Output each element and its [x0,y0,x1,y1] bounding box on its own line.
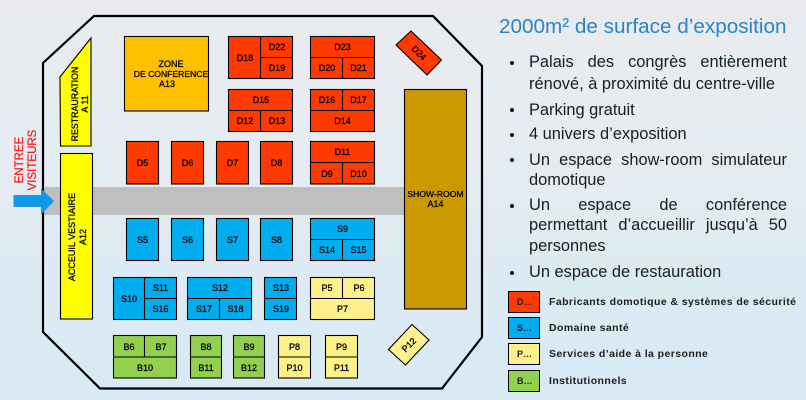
stand D8 [260,142,292,184]
stands S9 S14 S15 [310,218,374,260]
stand D24: D24 [410,44,428,62]
stands S12 S17 S18: S12 [212,283,228,293]
stands D15 D12 D13 [228,90,292,132]
stands S10 S11 S16: S16 [152,304,169,314]
stand P12: P12 [400,336,418,354]
stand D7 [216,142,248,184]
stands S9 S14 S15: S9 [337,224,348,234]
stand S6: S6 [182,235,193,245]
right column: D… [517,297,532,307]
stand D5: D5 [137,158,148,168]
right column: B… [517,376,532,386]
stands D15 D12 D13: D13 [269,116,285,126]
stands S9 S14 S15: S14 [319,245,335,255]
stands B6 B7 B10: B10 [137,363,153,373]
stands S9 S14 S15: S15 [350,245,367,255]
legend [508,291,796,392]
stands P5 P6 P7: P7 [337,304,348,314]
zone: conférence A13 [124,36,209,111]
stands D23 D20 D21: D23 [334,42,351,52]
stands D18 D22 D19: D19 [269,63,285,73]
stands D11 D9 D10: D10 [350,169,367,179]
stand D24 [396,31,442,75]
legend item: fabricants [508,291,796,313]
stands P8 P10: P10 [286,363,303,373]
stands D23 D20 D21 [310,36,374,78]
right column: personnes [529,237,606,255]
right column: P… [517,349,532,359]
zone: conférence A13: ZONE [158,59,184,69]
stands B6 B7 B10: B6 [123,342,135,352]
stands S13 S19: S13 [273,283,289,293]
right column: S… [517,323,532,333]
zone: conférence A13: DE CONFERENCE [134,69,209,79]
stands D15 D12 D13: D15 [253,95,269,105]
stands B6 B7 B10: B7 [155,342,167,352]
stand S6 [172,218,204,260]
stands P5 P6 P7 [310,278,374,320]
stands S10 S11 S16: S11 [153,283,168,293]
stand S8 [260,218,292,260]
stands P5 P6 P7: P5 [321,283,333,293]
stands D11 D9 D10 [310,142,374,184]
stands S12 S17 S18 [188,278,252,320]
stand D6 [172,142,204,184]
right column: Palais des congrès entièrement [529,53,787,71]
stands S10 S11 S16 [114,278,176,320]
bullet list [510,53,787,281]
right column: Domaine santé [549,322,629,334]
stands S12 S17 S18: S17 [196,304,212,314]
stands D18 D22 D19 [228,36,292,78]
stands D15 D12 D13: D12 [237,116,253,126]
stands P9 P11 [326,336,358,378]
stand S5: S5 [137,235,148,245]
stands D23 D20 D21: D21 [350,63,367,73]
stands D16 D17 D14: D14 [334,116,351,126]
right column: Services d’aide à la personne [549,348,708,360]
stand S7 [216,218,248,260]
stands D16 D17 D14: D16 [319,95,335,105]
right column: Un espace de conférence [529,196,787,214]
show-room A14 [404,90,466,309]
stands D11 D9 D10: D11 [335,147,350,157]
arrow: entrance [14,190,54,214]
right column: Institutionnels [549,375,627,387]
stand S7: S7 [227,235,238,245]
right column: permettant d’accueillir jusqu’à 50 [529,216,787,234]
stands S13 S19 [264,278,296,320]
stands P9 P11: P9 [336,342,347,352]
stands D23 D20 D21: D20 [319,63,335,73]
right column: Parking gratuit [529,101,635,119]
right column: rénové, à proximité du centre-ville [529,75,775,93]
right column: 4 univers d’exposition [529,125,687,143]
stands S12 S17 S18: S18 [227,304,244,314]
stands B6 B7 B10 [114,336,176,378]
stands B8 B11: B8 [200,342,212,352]
entrance label: VISITEURS [27,129,39,190]
zone: conférence A13: A13 [159,79,175,89]
stands D11 D9 D10: D9 [321,169,333,179]
zone: accueil vestiaire A12 [60,154,92,319]
stand D7: D7 [227,158,238,168]
zone: restauration A11: RESTRAURATION [70,67,80,141]
stands P9 P11: P11 [334,363,349,373]
stand P12 [388,324,429,365]
stands B9 B12 [234,336,264,378]
show-room A14: SHOW-ROOM [407,189,464,199]
stands D18 D22 D19: D22 [269,42,285,52]
right column: Un espace show-room simulateur [529,151,787,169]
zone: accueil vestiaire A12: A12 [78,229,88,245]
stands D16 D17 D14: D17 [350,95,367,105]
stands P8 P10 [278,336,310,378]
stands B9 B12: B9 [243,342,255,352]
title: 2000m² de surface d’exposition [499,15,786,38]
legend item: services [508,343,708,365]
zone: restauration A11: A 11 [80,95,90,113]
stands S10 S11 S16: S10 [121,294,137,304]
right column: Un espace de restauration [529,263,721,281]
stands S13 S19: S19 [273,304,289,314]
stands B8 B11 [190,336,222,378]
stand S8: S8 [271,235,282,245]
legend item: santé [508,317,629,339]
stand D8: D8 [271,158,282,168]
stand D6: D6 [182,158,193,168]
stands P5 P6 P7: P6 [353,283,365,293]
legend item: institutionnels [508,370,627,392]
stand D5 [126,142,158,184]
zone: restauration A11 [60,38,91,146]
stands D18 D22 D19: D18 [237,53,253,63]
show-room A14: A14 [427,199,444,209]
zone: accueil vestiaire A12: ACCEUIL VESTIAIRE [67,193,77,281]
stands D16 D17 D14 [310,90,374,132]
stands B9 B12: B12 [241,363,257,373]
hall outline [43,16,482,388]
stand S5 [126,218,158,260]
stands P8 P10: P8 [289,342,300,352]
stands B8 B11: B11 [198,363,214,373]
entrance label [14,129,39,190]
entrance label: ENTREE [14,136,26,183]
right column: domotique [529,171,606,189]
right column: Fabricants domotique & systèmes de sécurité [549,296,796,308]
